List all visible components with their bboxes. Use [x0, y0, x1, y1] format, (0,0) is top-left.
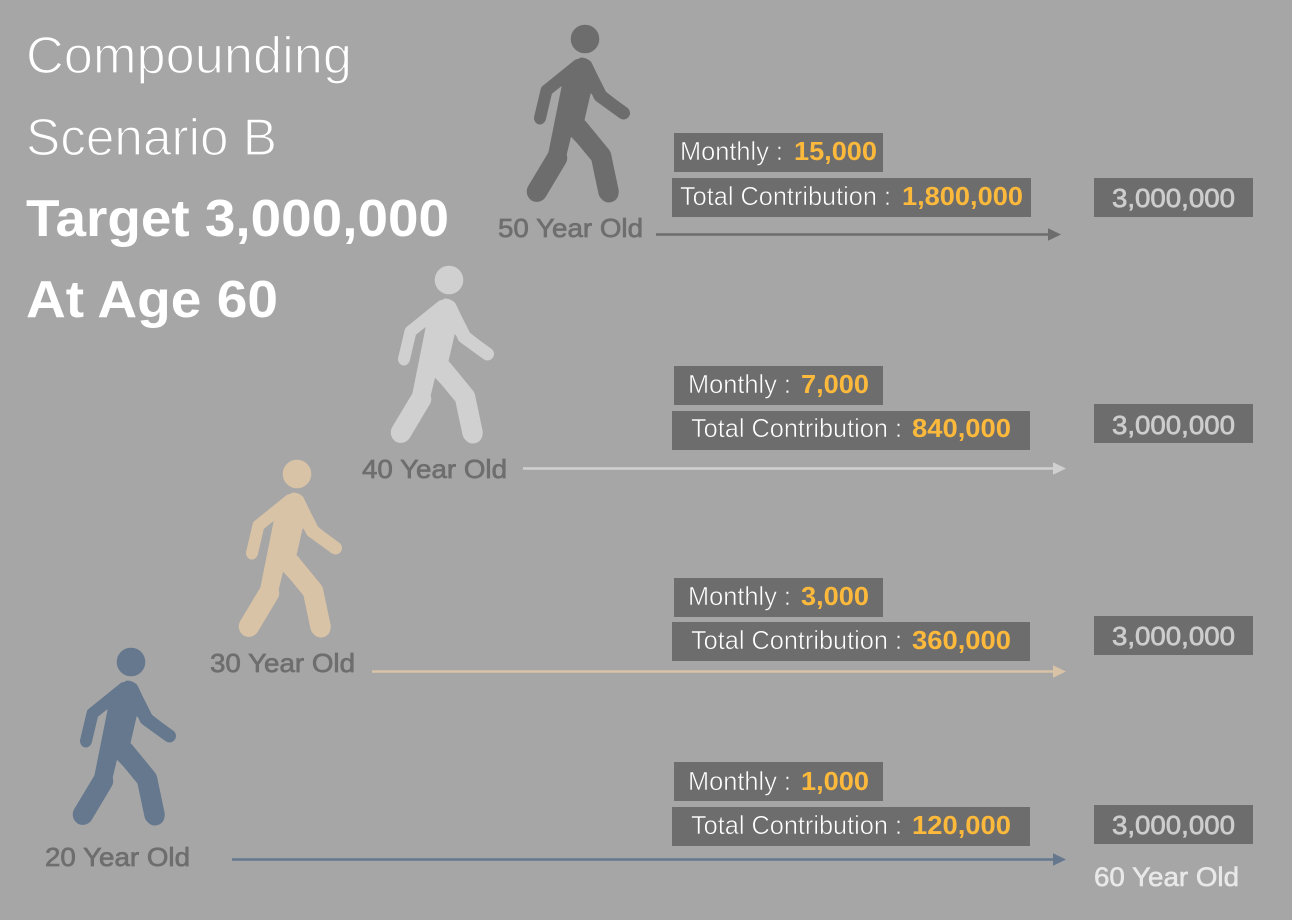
monthly box 30: Monthly : [688, 581, 791, 611]
arrow 50 to 60 [656, 228, 1061, 241]
monthly box 20: Monthly : [688, 766, 791, 796]
row: 30 year old [210, 460, 1253, 678]
total contribution box 30 [672, 622, 1030, 661]
row: 40 year old [362, 266, 1253, 484]
icon: walking person 30 [239, 460, 341, 638]
label: 30 Year Old: 30 Year Old [210, 648, 355, 678]
total contribution box 30: 360,000 [912, 625, 1011, 655]
arrow 30 to 60 [372, 665, 1066, 678]
total contribution box 40: 840,000 [912, 413, 1011, 443]
result box 50: 3,000,000 [1112, 183, 1235, 213]
result box 20: 3,000,000 [1112, 810, 1235, 840]
icon: walking person 40 [391, 266, 493, 444]
total contribution box 20 [672, 807, 1030, 846]
monthly box 50 [674, 133, 883, 172]
row: 50 year old [498, 25, 1253, 243]
result box 30 [1094, 616, 1253, 655]
monthly box 40: Monthly : [688, 369, 791, 399]
total contribution box 20: Total Contribution : [691, 810, 902, 840]
arrow 20 to 60 [232, 853, 1066, 866]
total contribution box 50: Total Contribution : [680, 181, 891, 211]
heading: age: At Age 60 [26, 271, 278, 329]
icon: walking person 20 [73, 648, 175, 826]
heading: target: Target 3,000,000 [26, 190, 449, 248]
total contribution box 30: Total Contribution : [691, 625, 902, 655]
total contribution box 40 [672, 411, 1030, 450]
total contribution box 50 [672, 178, 1031, 217]
monthly box 40 [674, 366, 883, 405]
monthly box 50: 15,000 [794, 136, 877, 166]
title: Compounding: Compounding [26, 27, 352, 85]
total contribution box 20: 120,000 [912, 810, 1011, 840]
result box 50 [1094, 178, 1253, 217]
result box 20 [1094, 805, 1253, 844]
result box 40: 3,000,000 [1112, 410, 1235, 440]
row: 20 year old [45, 648, 1253, 872]
arrow 40 to 60 [523, 462, 1066, 475]
label: 40 Year Old: 40 Year Old [362, 454, 507, 484]
monthly box 30: 3,000 [801, 581, 869, 611]
title: Scenario B: Scenario B [26, 109, 277, 167]
total contribution box 40: Total Contribution : [691, 413, 902, 443]
monthly box 40: 7,000 [801, 369, 869, 399]
monthly box 50: Monthly : [680, 136, 783, 166]
label: 50 Year Old: 50 Year Old [498, 213, 643, 243]
result box 30: 3,000,000 [1112, 621, 1235, 651]
icon: walking person 50 [527, 25, 629, 203]
monthly box 20: 1,000 [801, 766, 869, 796]
label: 60 Year Old: 60 Year Old [1094, 862, 1239, 892]
result box 40 [1094, 404, 1253, 443]
monthly box 20 [674, 762, 883, 801]
title block [26, 27, 449, 329]
total contribution box 50: 1,800,000 [902, 181, 1023, 211]
label: 20 Year Old: 20 Year Old [45, 842, 190, 872]
monthly box 30 [674, 578, 883, 617]
